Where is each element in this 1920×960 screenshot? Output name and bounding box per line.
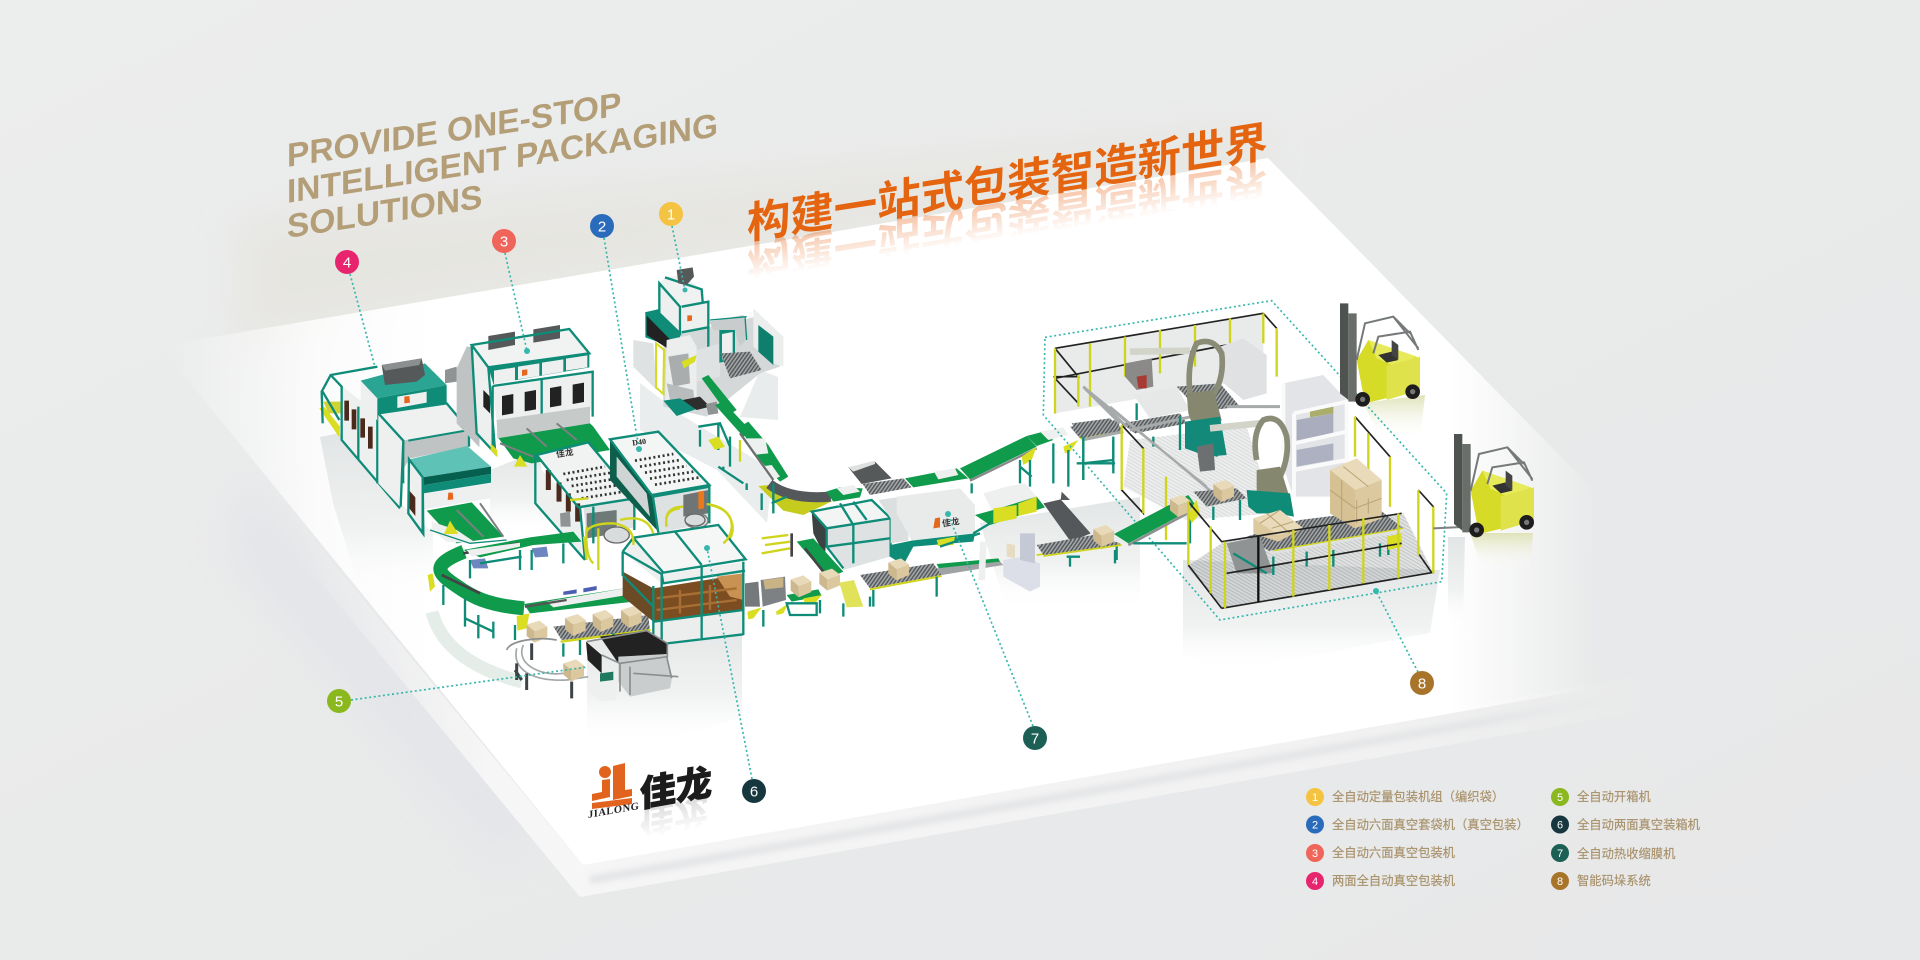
warm tint behind headings bbox=[240, 130, 1268, 345]
label: D40: D40 bbox=[632, 437, 647, 448]
legend item 1: 1 bbox=[1312, 792, 1318, 804]
callout 4: 4 bbox=[343, 254, 351, 272]
legend item 6: 全自动两面真空装箱机 bbox=[1577, 817, 1701, 832]
logo text chinese: 佳龙 bbox=[640, 754, 712, 818]
platform lip stripe bbox=[590, 694, 1640, 880]
conveyor: U-shaped belt bbox=[428, 532, 648, 640]
logo: jialong bbox=[588, 754, 712, 850]
machines: centre line bbox=[715, 402, 1123, 607]
logo text latin: JIALONG bbox=[588, 801, 639, 821]
callout 3 bbox=[492, 229, 516, 253]
conveyor under machine 1 bbox=[698, 375, 737, 467]
legend item 8: 智能码垛系统 bbox=[1577, 873, 1651, 888]
legend item 6: 6 bbox=[1557, 820, 1563, 832]
legend item 5: 全自动开箱机 bbox=[1577, 789, 1651, 804]
title: english: INTELLIGENT PACKAGING bbox=[287, 106, 718, 211]
forklift 1 bbox=[1340, 303, 1420, 407]
machines: lower left bbox=[428, 505, 870, 701]
legend item 2: 2 bbox=[1312, 820, 1318, 832]
front fence bbox=[1188, 490, 1470, 608]
legend item 3: 全自动六面真空包装机 bbox=[1332, 845, 1456, 860]
legend item 3 bbox=[1306, 844, 1456, 862]
floor reflections bbox=[320, 370, 1533, 747]
title: english: PROVIDE ONE-STOP bbox=[287, 85, 621, 175]
legend item 5 bbox=[1551, 788, 1651, 806]
callout 6 bbox=[742, 779, 766, 803]
logo reflection: 佳龙 bbox=[640, 788, 708, 850]
legend item 6 bbox=[1551, 816, 1701, 834]
title reflection: 构建一站式包装智造新世界 bbox=[747, 151, 1268, 297]
pallet cartons bbox=[1253, 458, 1382, 542]
fence mid bbox=[1122, 417, 1390, 513]
legend bbox=[1306, 788, 1701, 890]
callout 1 bbox=[659, 202, 683, 226]
callout 4 bbox=[335, 250, 359, 274]
robot arm 2 bbox=[1197, 419, 1294, 517]
callout 5 bbox=[327, 689, 351, 713]
floor grid bbox=[1187, 513, 1433, 608]
palletizing area bbox=[1040, 301, 1534, 620]
legend item 8 bbox=[1551, 872, 1651, 890]
platform surface bbox=[160, 158, 1670, 865]
machine 3: six-sided vacuum packer bbox=[445, 325, 610, 467]
conveyor incline bbox=[1040, 387, 1247, 563]
callout leader lines bbox=[350, 226, 1418, 779]
forklift 2 bbox=[1454, 434, 1534, 537]
legend item 2 bbox=[1306, 816, 1529, 834]
callout 8 bbox=[1410, 671, 1434, 695]
legend item 4 bbox=[1306, 872, 1456, 890]
machine 7: shrink wrap tunnel: 佳龙 bbox=[941, 515, 960, 529]
legend item 4: 4 bbox=[1312, 876, 1318, 888]
roller table bbox=[1227, 510, 1403, 575]
region outline 8 bbox=[1043, 301, 1447, 620]
title: english: SOLUTIONS bbox=[287, 178, 482, 246]
callout 1: 1 bbox=[667, 206, 675, 224]
back fence bbox=[1053, 313, 1277, 413]
machine 3b: six-sided bagger: 佳龙 bbox=[555, 446, 574, 459]
legend item 1 bbox=[1306, 788, 1504, 806]
machine 1: auto quantitative packing bbox=[633, 267, 783, 417]
logo mark bbox=[592, 763, 632, 809]
machine 5: carton opener bbox=[507, 631, 678, 701]
callout 6: 6 bbox=[750, 784, 758, 800]
legend item 7: 全自动热收缩膜机 bbox=[1577, 846, 1676, 861]
wheels and rails bbox=[584, 505, 732, 570]
rack bbox=[1283, 375, 1347, 497]
callout 5: 5 bbox=[335, 694, 343, 710]
platform lip bbox=[235, 445, 1660, 897]
carton on conveyor bbox=[1093, 480, 1234, 547]
callout 7: 7 bbox=[1031, 730, 1039, 748]
legend item 4: 两面全自动真空包装机 bbox=[1332, 873, 1456, 888]
platform shadow bbox=[230, 470, 540, 860]
conveyor to machine 6 side bbox=[745, 569, 870, 627]
machine 6: two-sided vacuum carton packer bbox=[623, 525, 746, 646]
machines: left cluster bbox=[319, 267, 783, 563]
conveyor: curved central belt bbox=[715, 402, 1123, 515]
callout 3: 3 bbox=[500, 234, 508, 250]
conveyor: rollers with cartons bbox=[527, 606, 651, 657]
legend item 8: 8 bbox=[1557, 876, 1563, 888]
machine 7: shrink wrap tunnel bbox=[762, 483, 1121, 607]
machine 2: D40 bagger bbox=[610, 432, 733, 548]
robot arm 1 bbox=[1125, 341, 1227, 457]
legend item 5: 5 bbox=[1557, 792, 1563, 804]
machine 3b: six-sided bagger bbox=[535, 442, 653, 563]
legend item 2: 全自动六面真空套袋机（真空包装） bbox=[1332, 817, 1529, 832]
carton stack white bbox=[1220, 338, 1267, 400]
conveyors rear bbox=[1072, 383, 1280, 480]
machine 4: two-sided vacuum packer bbox=[319, 358, 507, 543]
callout 8: 8 bbox=[1418, 676, 1426, 692]
legend item 7: 7 bbox=[1557, 848, 1563, 860]
title: chinese: 构建一站式包装智造新世界 bbox=[747, 106, 1268, 252]
callout 2 bbox=[590, 214, 614, 238]
legend item 1: 全自动定量包装机组（编织袋） bbox=[1332, 789, 1504, 804]
title: english bbox=[287, 85, 718, 246]
callout 2: 2 bbox=[598, 218, 606, 236]
callout 7 bbox=[1023, 726, 1047, 750]
legend item 7 bbox=[1551, 844, 1676, 862]
legend item 3: 3 bbox=[1312, 848, 1318, 860]
